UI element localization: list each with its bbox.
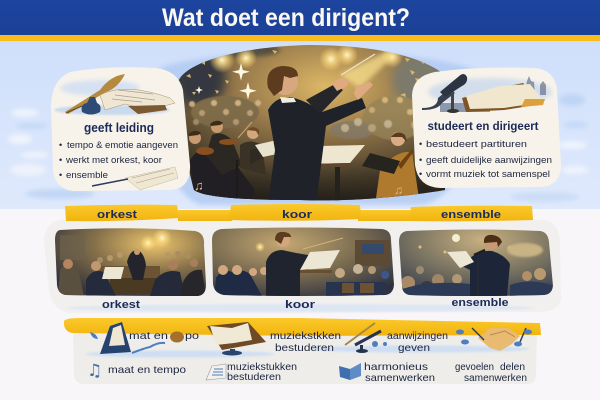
bullet list: • xyxy=(419,139,422,149)
heading: studeert en dirigeert xyxy=(428,119,538,133)
scene labels: ensemble xyxy=(452,297,508,309)
icon: metronome xyxy=(100,322,165,354)
lower task labels: muziekstukken xyxy=(227,362,297,373)
title banner xyxy=(0,0,600,41)
lower task labels: maat en tempo xyxy=(108,364,186,376)
lower task labels: harmonieus xyxy=(364,361,428,373)
bullet list: vormt muziek tot samenspel xyxy=(426,169,550,180)
upper task labels: bestuderen xyxy=(275,342,334,354)
upper task labels: aanwijzingen xyxy=(387,330,448,342)
upper task labels: geven xyxy=(398,342,430,354)
yellow ribbon labels xyxy=(65,204,533,221)
main illustration: conductor on stage xyxy=(178,45,445,200)
bullet list: • xyxy=(419,155,422,165)
icon: walnut xyxy=(170,332,184,342)
bullet list: tempo & emotie aangeven xyxy=(67,140,178,151)
ribbon text xyxy=(97,209,501,221)
bullet list: • xyxy=(59,140,62,150)
bullet list: bestudeert partituren xyxy=(426,139,527,150)
bullet list: werkt met orkest, koor xyxy=(65,155,162,166)
watercolour washes xyxy=(8,52,589,205)
yellow band xyxy=(64,318,541,336)
bullet list: • xyxy=(59,155,62,165)
lower task labels: gevoelen xyxy=(455,362,494,373)
icon: leaf xyxy=(90,332,98,339)
lower task labels: samenwerken xyxy=(464,373,527,384)
upper dark speckled backdrop xyxy=(174,43,444,106)
scene labels xyxy=(102,297,508,311)
baton xyxy=(341,54,375,75)
scene: orkest xyxy=(55,228,206,296)
bullet list: ensemble xyxy=(66,170,108,181)
lower task labels: samenwerken xyxy=(365,372,435,384)
icon: score sheet and pen xyxy=(92,167,178,190)
icon: open score on stand xyxy=(207,322,266,356)
music notes decoration: ♫ xyxy=(194,178,204,193)
scene: ensemble xyxy=(399,230,553,296)
icon: music note: ♫ xyxy=(87,361,102,381)
darkened lower stage xyxy=(190,125,445,200)
upper task labels xyxy=(129,330,448,354)
title: Wat doet een dirigent? xyxy=(162,4,410,32)
music notes decoration xyxy=(194,178,403,197)
left musicians xyxy=(188,121,277,205)
lower task labels: delen xyxy=(500,362,525,373)
upper task labels: po xyxy=(185,330,199,342)
heading: geeft leiding xyxy=(84,120,154,135)
icon: score page xyxy=(206,364,226,380)
bullet list: • xyxy=(59,170,62,180)
conductor figure xyxy=(267,54,375,205)
audience xyxy=(189,96,427,140)
scene labels: orkest xyxy=(102,299,140,311)
scene: koor xyxy=(212,228,394,296)
icon: quill, ink pot and book xyxy=(54,74,175,115)
left card: geeft leiding xyxy=(51,67,190,191)
upper task labels: muziekstkken xyxy=(270,330,341,342)
lower task labels: bestuderen xyxy=(227,372,281,383)
upper task labels: mat en xyxy=(129,330,168,342)
lower panel: three scenes xyxy=(44,217,561,313)
music notes decoration: ♫ xyxy=(394,183,403,197)
lower task labels xyxy=(108,361,527,384)
bottom panel: tasks xyxy=(64,318,541,384)
scene labels: koor xyxy=(285,299,316,311)
ribbon text: orkest xyxy=(97,209,137,221)
right musicians and lectern xyxy=(321,132,418,200)
icon: microphone and open book xyxy=(422,74,552,113)
bullet list xyxy=(59,140,178,181)
ribbon text: ensemble xyxy=(441,209,501,221)
icon: blue book xyxy=(339,363,361,380)
ribbon text: koor xyxy=(282,209,313,221)
right card: studeert en dirigeert xyxy=(412,68,561,188)
icon: handshake with laurel xyxy=(456,328,532,351)
bullet list: geeft duidelijke aanwijzingen xyxy=(426,155,552,166)
bullet list: • xyxy=(419,169,422,179)
bullet list xyxy=(419,139,552,180)
stage lights xyxy=(195,44,403,100)
icon: baton and music stand xyxy=(345,323,387,353)
